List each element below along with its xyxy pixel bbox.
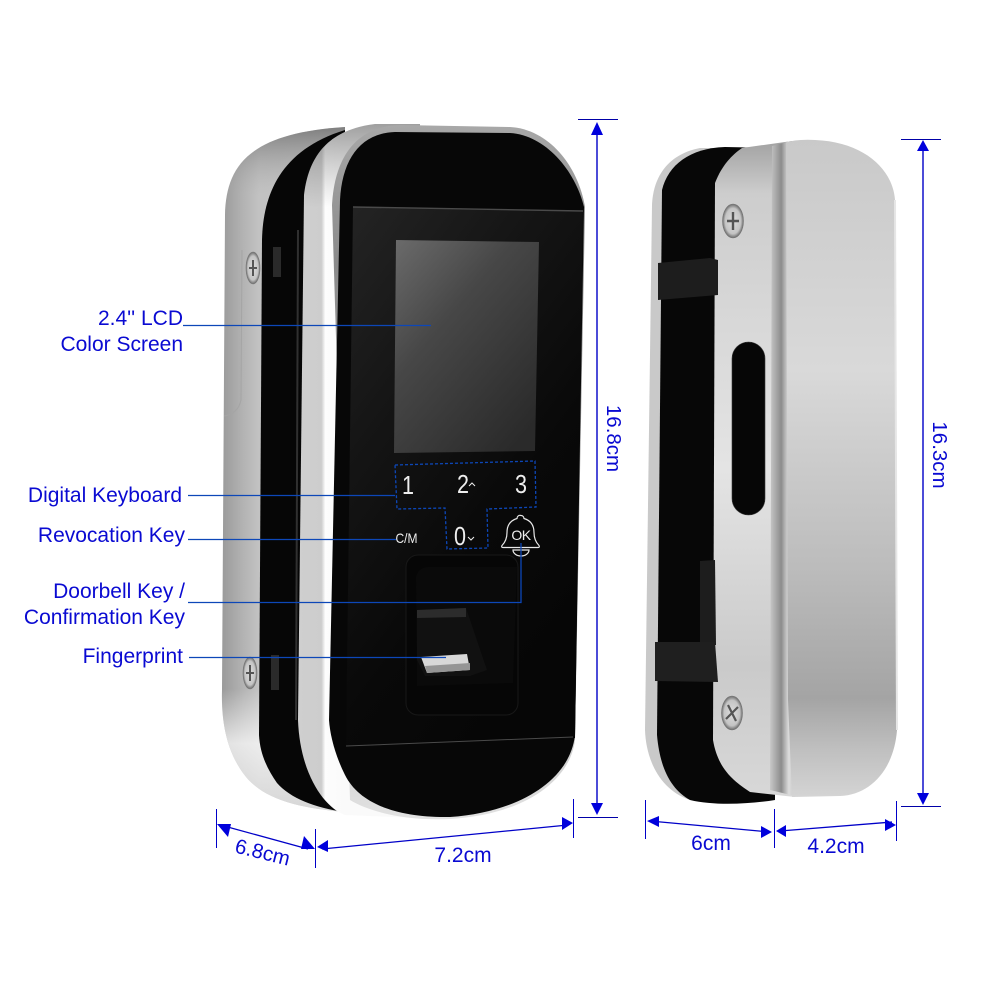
silver bevel — [770, 141, 795, 796]
dimension: front height 16.8cm: 16.8cm — [602, 405, 625, 472]
dimension: side height 16.3cm: 16.3cm — [928, 421, 951, 489]
rubber tab top — [658, 258, 718, 300]
leader: doorbell — [188, 543, 521, 602]
screw bottom — [243, 657, 257, 689]
rear silver housing — [222, 127, 345, 812]
callout labels — [24, 307, 185, 668]
screw bottom — [722, 696, 742, 730]
oval slot — [732, 342, 765, 515]
label: doorbell key: Doorbell Key / — [53, 580, 185, 603]
clamp slot bottom — [271, 655, 279, 690]
rubber tab bottom — [655, 560, 718, 682]
dimension: width 7.2cm — [317, 799, 574, 867]
label: LCD: 2.4'' LCD — [98, 307, 183, 330]
label: color screen: Color Screen — [60, 333, 183, 356]
callout leaders — [183, 326, 536, 658]
black glass clamp band — [259, 130, 345, 812]
leader: keyboard — [188, 494, 395, 496]
device: front view of lock — [222, 124, 585, 819]
panel top edge — [353, 207, 583, 211]
dimension: front height 16.8cm — [578, 120, 625, 818]
band groove — [296, 230, 298, 720]
digit 1: 1 — [402, 470, 414, 500]
screw top — [246, 252, 260, 284]
black inner body — [657, 147, 775, 804]
outer silver edge — [645, 148, 745, 803]
dimension: depth 6.8cm — [216, 809, 316, 871]
label: fingerprint: Fingerprint — [83, 645, 183, 668]
down caret — [468, 537, 474, 540]
icon: doorbell OK key — [502, 515, 539, 556]
label: confirmation key: Confirmation Key — [24, 606, 185, 629]
dimension: depth 6cm: 6cm — [691, 832, 731, 855]
lower panel divider — [346, 737, 573, 746]
digit 2: 2 — [457, 469, 469, 499]
revocation key C/M: C/M — [396, 530, 418, 546]
LCD glass panel — [346, 207, 583, 746]
chrome band top shading — [298, 124, 420, 818]
digit 3: 3 — [515, 469, 527, 499]
dimension: depth 4.2cm — [776, 801, 896, 858]
leader: revocation — [188, 538, 396, 540]
icon: doorbell OK key: OK — [511, 527, 532, 543]
chrome trim band — [298, 124, 420, 818]
clamp slot top — [273, 247, 281, 277]
silver casing strip — [713, 141, 795, 797]
silver top rim — [332, 125, 585, 819]
dimension: depth 6.8cm: 6.8cm — [233, 835, 292, 871]
digit 0: 0 — [454, 521, 466, 551]
cover right edge highlight — [895, 200, 897, 730]
screw top — [722, 204, 744, 238]
keyboard dashed outline — [395, 461, 536, 549]
silver main cover — [786, 140, 897, 797]
device: side view of lock — [645, 140, 897, 804]
black front face — [329, 132, 584, 817]
leader: LCD — [183, 324, 431, 326]
keypad digits — [396, 469, 527, 551]
dimension: side height 16.3cm — [901, 140, 951, 806]
fingerprint reader — [406, 555, 518, 715]
leader: fingerprint — [189, 656, 446, 658]
up caret — [469, 483, 475, 486]
label: digital keyboard: Digital Keyboard — [28, 484, 182, 507]
dimension: depth 4.2cm: 4.2cm — [807, 835, 865, 858]
dimension: width 7.2cm: 7.2cm — [434, 844, 492, 867]
label: revocation key: Revocation Key — [38, 524, 185, 547]
dimension: depth 6cm — [646, 800, 774, 855]
LCD colour screen — [394, 240, 539, 453]
